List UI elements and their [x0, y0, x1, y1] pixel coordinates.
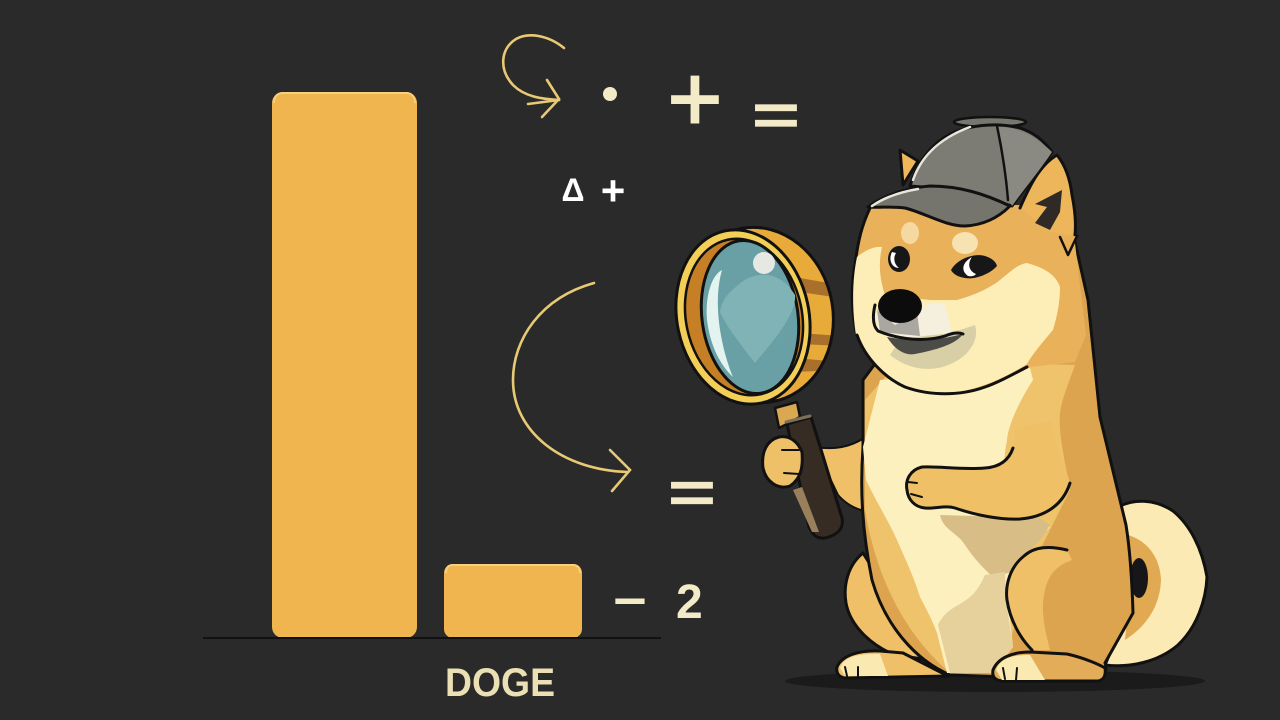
mouth [887, 334, 963, 354]
doge detective illustration [815, 117, 1207, 681]
far arm [815, 438, 870, 512]
rim inner [671, 228, 817, 406]
head [852, 205, 1086, 394]
right ear [1020, 155, 1077, 255]
magnifying glass [674, 226, 844, 540]
jaw line [857, 335, 1027, 394]
body [862, 233, 1133, 680]
right brow spot [952, 232, 978, 254]
seam line [997, 126, 1008, 200]
tail [1105, 501, 1207, 666]
hat brim [868, 186, 1010, 226]
baseline [203, 637, 661, 639]
body light side [865, 360, 1075, 673]
back leg [845, 553, 930, 660]
left foot [837, 651, 948, 678]
cheek and muzzle fur [853, 247, 1060, 393]
hand [763, 437, 802, 487]
brow spots [901, 222, 919, 244]
head outline left [852, 208, 870, 335]
rim band [736, 226, 835, 404]
mouth line [873, 305, 963, 339]
axis label: DOGE [445, 661, 555, 705]
lens glare [753, 252, 775, 274]
rim front [660, 217, 826, 417]
lens diamond reflection [720, 275, 795, 363]
lower belly shade [938, 572, 1013, 673]
belly [863, 368, 1050, 673]
muzzle shading [877, 310, 920, 336]
right eye [951, 255, 997, 278]
bar chart [203, 92, 661, 639]
hat crown [910, 125, 1052, 206]
nose [878, 289, 922, 323]
right foot [993, 652, 1105, 681]
arm [907, 420, 1070, 519]
belly shade [940, 515, 1050, 577]
brim highlight [872, 189, 918, 206]
hat seam and shaded panel [997, 127, 1052, 206]
lens highlight [707, 270, 733, 377]
hat button [954, 117, 1026, 127]
short bar [444, 564, 582, 638]
math symbol: plus: + [668, 46, 722, 151]
value label: − [613, 573, 647, 629]
left eye [888, 246, 910, 272]
muzzle [875, 303, 952, 338]
crown highlight [913, 127, 970, 180]
math symbols: triangle and plus: Δ [562, 172, 584, 208]
tall bar [272, 92, 417, 638]
ground shadow [785, 670, 1205, 692]
curved arrow: lower [513, 283, 630, 491]
math symbol: equals: = [753, 80, 799, 150]
hat [868, 117, 1052, 226]
small plus: + [601, 167, 625, 214]
lens [692, 234, 808, 400]
chin shade [890, 325, 976, 369]
math symbol: dot [603, 87, 617, 101]
haunch [1007, 540, 1130, 660]
handle [775, 402, 842, 538]
value label [613, 573, 703, 629]
curved arrow: top [503, 35, 564, 117]
math symbol: lower equals: = [669, 458, 715, 527]
value label: 2 [676, 576, 703, 629]
left ear [900, 150, 918, 185]
